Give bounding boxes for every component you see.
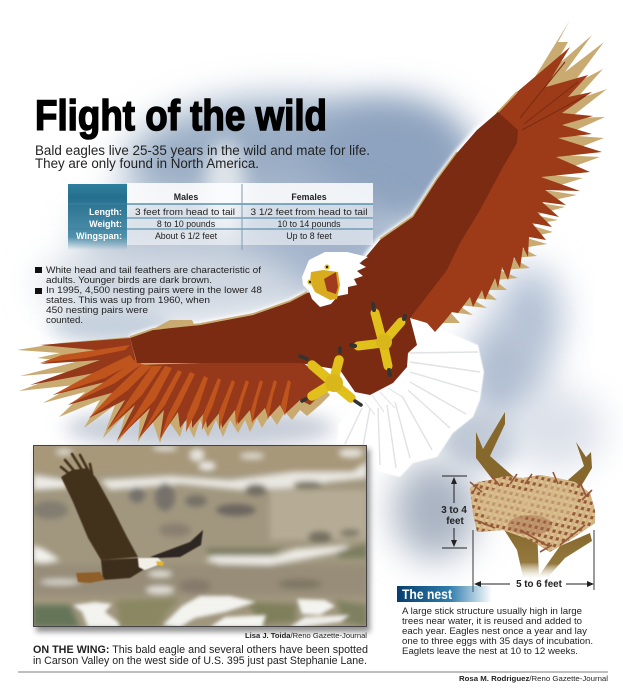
nest illustration xyxy=(441,412,600,592)
size table: Weight: xyxy=(89,219,122,229)
nest text: trees near water, it is reused and added to xyxy=(402,616,582,627)
photo credit: Lisa J. Toida/Reno Gazette-Journal xyxy=(245,631,367,640)
nest text: Eaglets leave the nest at 10 to 12 weeks. xyxy=(402,646,578,657)
height label xyxy=(441,505,467,527)
intro text xyxy=(35,143,370,171)
right wing small tan covert xyxy=(458,130,477,162)
size table: 8 to 10 pounds xyxy=(157,219,216,229)
size table: About 6 1/2 feet xyxy=(155,231,218,241)
photo caption: in Carson Valley on the west side of U.S. 395 just past Stephanie Lane. xyxy=(33,655,367,667)
bullet notes: In 1995, 4,500 nesting pairs were in the lower 48 xyxy=(46,285,262,295)
body and inner wings xyxy=(130,112,518,395)
intro text: They are only found in North America. xyxy=(35,156,259,171)
upper talon xyxy=(351,304,405,375)
left wing brown feathers xyxy=(30,338,330,440)
height dimension xyxy=(442,476,467,548)
size table: Up to 8 feet xyxy=(286,231,332,241)
bullet notes: adults. Younger birds are dark brown. xyxy=(46,275,212,285)
photo: eagle over Carson Valley xyxy=(32,445,370,632)
bullet notes xyxy=(35,265,262,325)
height label: 3 to 4 xyxy=(441,505,467,516)
tan leading edge xyxy=(130,92,517,337)
photo caption xyxy=(33,644,368,667)
left wing tan feather tips xyxy=(17,337,330,443)
bullet notes: counted. xyxy=(46,315,83,325)
intro text: Bald eagles live 25-35 years in the wild and mate for life. xyxy=(35,143,370,158)
head xyxy=(302,252,368,307)
photo caption: ON THE WING: This bald eagle and several others have been spotted xyxy=(33,644,368,656)
left wing covert highlight xyxy=(155,320,195,330)
size table: 10 to 14 pounds xyxy=(277,219,341,229)
left wing orange feathers xyxy=(40,345,291,440)
graphic credit: Rosa M. Rodriguez /Reno Gazette-Journal xyxy=(459,674,608,683)
nest sticks xyxy=(470,472,595,553)
nest text: one to three eggs with 35 days of incubation. xyxy=(402,636,593,647)
mouth xyxy=(324,272,338,294)
nest text: each year. Eagles nest once a year and lay xyxy=(402,626,587,637)
lower talon xyxy=(300,348,361,405)
right wing red feathers xyxy=(410,47,602,332)
nest panel heading xyxy=(397,586,492,602)
size table: Wingspan: xyxy=(76,231,122,241)
nest panel heading: The nest xyxy=(402,586,452,602)
nest text: A large stick structure usually high in large xyxy=(402,606,582,617)
size table: Females xyxy=(291,192,327,202)
tree branches xyxy=(476,412,592,577)
white tail xyxy=(337,320,484,477)
right wing primary separations xyxy=(520,62,585,130)
size table xyxy=(68,183,373,250)
bullet notes: states. This was up from 1960, when xyxy=(46,295,210,305)
width dimension xyxy=(473,530,594,592)
photo eagle xyxy=(61,454,203,583)
illustrated bald eagle xyxy=(17,20,607,477)
right wing tan feather tips xyxy=(420,20,607,323)
height label: feet xyxy=(446,516,464,527)
white halo around wing xyxy=(130,93,517,338)
width label: 5 to 6 feet xyxy=(516,579,563,590)
bullet notes: 450 nesting pairs were xyxy=(46,305,148,315)
size table: 3 1/2 feet from head to tail xyxy=(250,207,368,217)
title: Flight of the wild xyxy=(35,92,327,140)
nest text xyxy=(402,606,593,657)
beak xyxy=(310,270,340,300)
size table: 3 feet from head to tail xyxy=(135,207,235,217)
size table: Males xyxy=(174,192,198,202)
size table: Length: xyxy=(89,207,122,217)
bullet notes: White head and tail feathers are characteristic of xyxy=(46,265,261,275)
